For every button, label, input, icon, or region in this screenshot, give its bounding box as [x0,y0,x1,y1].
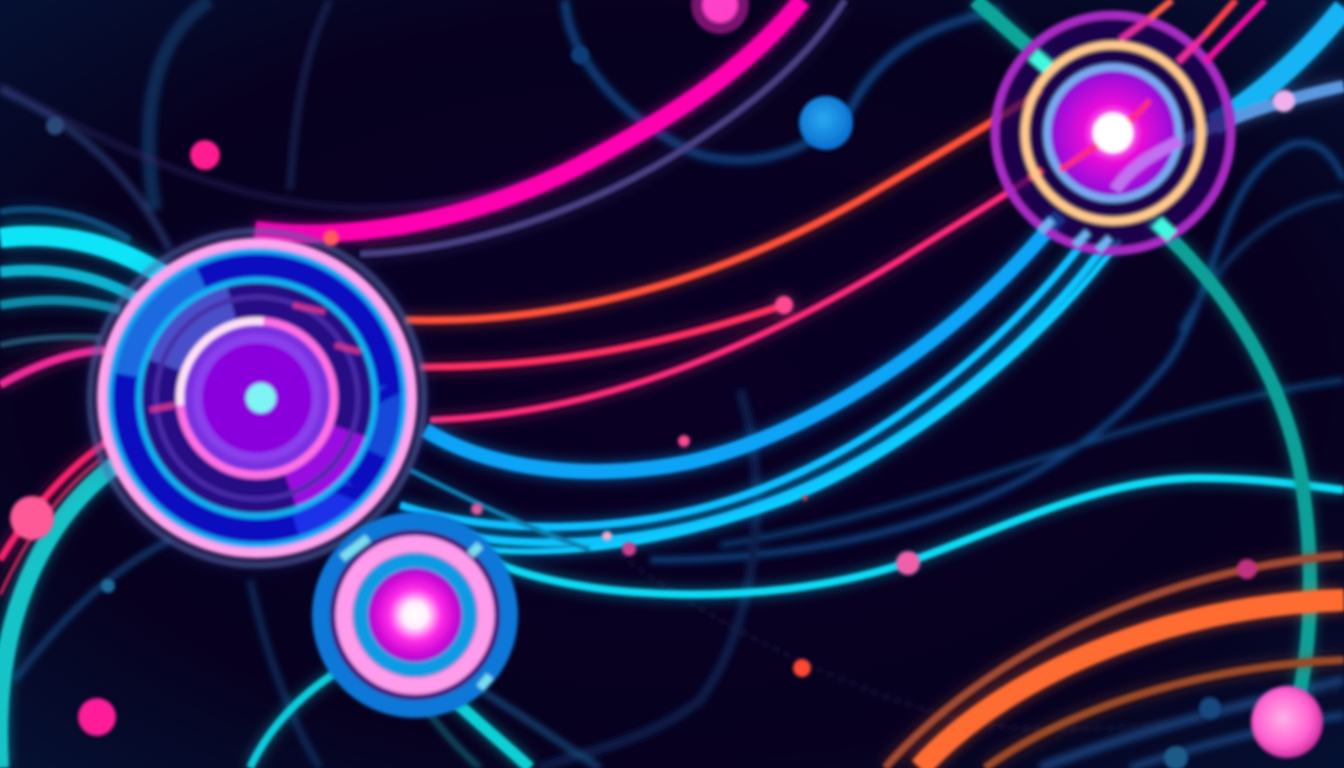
centre target [179,320,335,476]
magenta arc [255,0,845,254]
outer blue band [69,210,445,586]
dark disc [107,248,407,548]
orange arcs bottom right [885,555,1344,768]
large ring node [69,210,445,586]
lower ring node [321,521,509,709]
inner dark band with sectors [131,272,383,524]
pink crossing ticks [150,305,360,410]
upper right ring node [995,0,1265,251]
blue and cyan streams [400,8,1344,594]
lines crossing the top of the ring [1030,0,1265,178]
red and pink lines [405,98,1030,420]
left cyan arcs [0,209,170,595]
